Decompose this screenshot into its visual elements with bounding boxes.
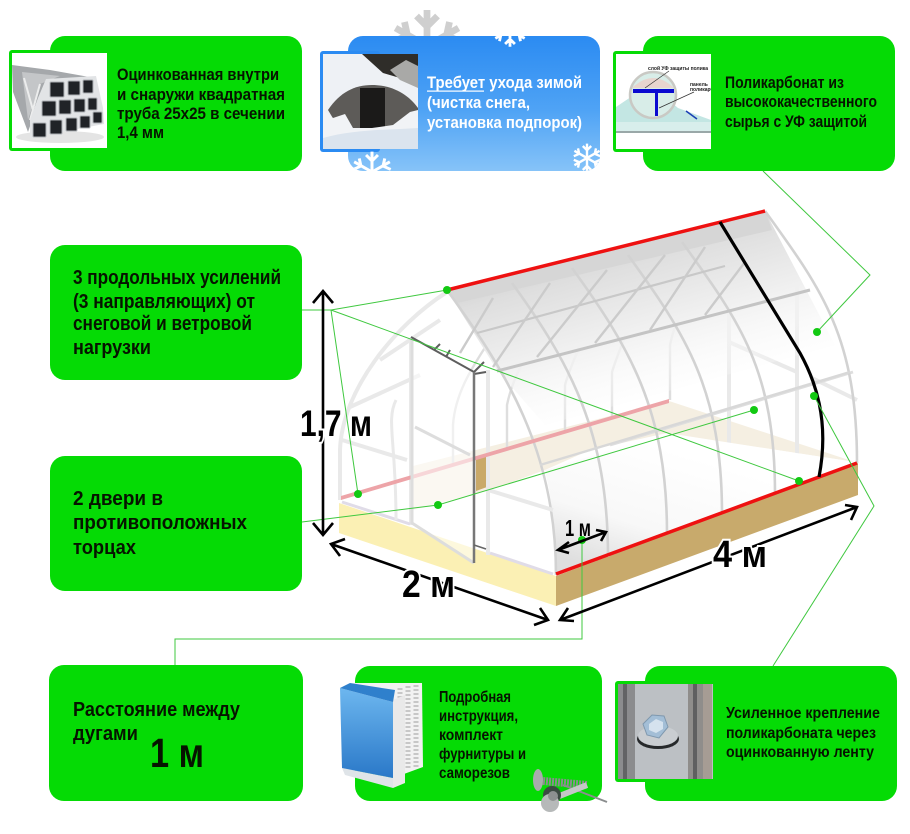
far ridge lines and far arches <box>453 240 857 470</box>
image: steel pipes <box>12 53 107 148</box>
text: doors: торцах <box>73 537 136 559</box>
panel: instructions and hardware <box>340 666 607 812</box>
arrow: width dimension <box>331 539 548 625</box>
black arch highlight <box>720 222 823 477</box>
text: reinforcements: снеговой и ветровой <box>73 313 252 335</box>
text: winter care: (чистка снега, <box>427 93 530 112</box>
text: polycarbonate <box>725 73 877 131</box>
text: winter care: установка подпорок) <box>427 113 582 132</box>
base: timber frame <box>339 463 858 606</box>
icons: white snowflakes <box>354 36 600 171</box>
panel: longitudinal reinforcements <box>50 245 302 380</box>
label: 2 m: 2 м <box>402 564 455 606</box>
text: reinforcements <box>73 267 281 359</box>
roof ridge band <box>447 211 772 303</box>
near side arches <box>447 211 857 575</box>
text: instructions <box>439 689 526 782</box>
image: bolt on galvanised tape <box>618 684 713 779</box>
greenhouse illustration <box>339 211 858 606</box>
text: arc distance: Расстояние между <box>73 699 241 721</box>
arrow: length dimension <box>560 505 857 621</box>
front end frame <box>340 292 553 574</box>
text: arc distance: дугами <box>73 723 138 745</box>
roof panel shading <box>447 211 835 425</box>
text: winter care <box>427 73 582 132</box>
pink far sill line <box>341 399 669 500</box>
image: snow-covered greenhouse <box>323 54 418 149</box>
callout lines with dots <box>175 171 874 666</box>
text: instructions: инструкция, <box>439 708 518 725</box>
text: pipe description: Оцинкованная внутри <box>117 65 279 84</box>
text: polycarbonate: сырья с УФ защитой <box>725 112 867 131</box>
label: 4 m: 4 м <box>713 534 767 576</box>
panel: two doors <box>50 456 302 591</box>
text: instructions: комплект <box>439 727 503 744</box>
red sill line <box>556 463 857 574</box>
interior floor <box>413 401 855 510</box>
text: arc distance <box>73 699 241 776</box>
near wall <box>545 433 855 575</box>
text: pipe description: и снаружи квадратная <box>117 85 285 104</box>
text: pipe description <box>117 65 285 142</box>
panel: polycarbonate <box>613 36 895 171</box>
text: fastening: Усиленное крепление <box>726 705 880 722</box>
roof purlins and diagonal braces <box>460 247 850 465</box>
text: doors: 2 двери в <box>73 488 163 510</box>
text: reinforcements: нагрузки <box>73 337 151 359</box>
text: instructions: Подробная <box>439 689 511 706</box>
text: fastening <box>726 705 880 761</box>
panel: winter care <box>320 36 600 171</box>
text: doors <box>73 488 247 559</box>
panel: reinforced fastening <box>615 666 897 801</box>
red ridge line <box>447 211 765 290</box>
icon: self-tapping screws <box>533 769 607 812</box>
text: fastening: оцинкованную ленту <box>726 744 874 761</box>
text: pipe description: 1,4 мм <box>117 123 164 142</box>
arrow: height dimension <box>313 291 333 535</box>
text: pipe description: труба 25х25 в сечении <box>117 104 285 123</box>
open door <box>411 337 486 563</box>
text: fastening: поликарбоната через <box>726 725 876 742</box>
image: UV layer cross-section: слой УФ защиты полика <box>648 65 708 72</box>
snowflake: grey above winter panel <box>394 10 460 82</box>
image: UV layer cross-section: поликарб <box>690 86 714 93</box>
text: winter care: Требует ухода зимой <box>427 73 582 92</box>
text: doors: противоположных <box>73 512 247 534</box>
panel: galvanised pipe <box>9 36 302 171</box>
image: UV layer cross-section <box>616 54 714 149</box>
text: polycarbonate: Поликарбонат из <box>725 73 844 92</box>
text: instructions: фурнитуры и <box>439 746 526 763</box>
panel: arc distance <box>49 665 303 801</box>
text: arc distance: 1 м <box>150 730 204 776</box>
text: reinforcements: 3 продольных усилений <box>73 267 281 289</box>
image: UV layer cross-section: панель <box>690 82 708 88</box>
text: instructions: саморезов <box>439 765 510 782</box>
label: arc spacing 1 m: 1 м <box>565 515 591 541</box>
label: 1,7 m: 1,7 м <box>300 403 372 444</box>
text: polycarbonate: высококачественного <box>725 92 877 111</box>
arrow: arc spacing <box>558 530 606 553</box>
text: reinforcements: (3 направляющих) от <box>73 291 255 313</box>
icon: blue booklet <box>340 683 423 788</box>
